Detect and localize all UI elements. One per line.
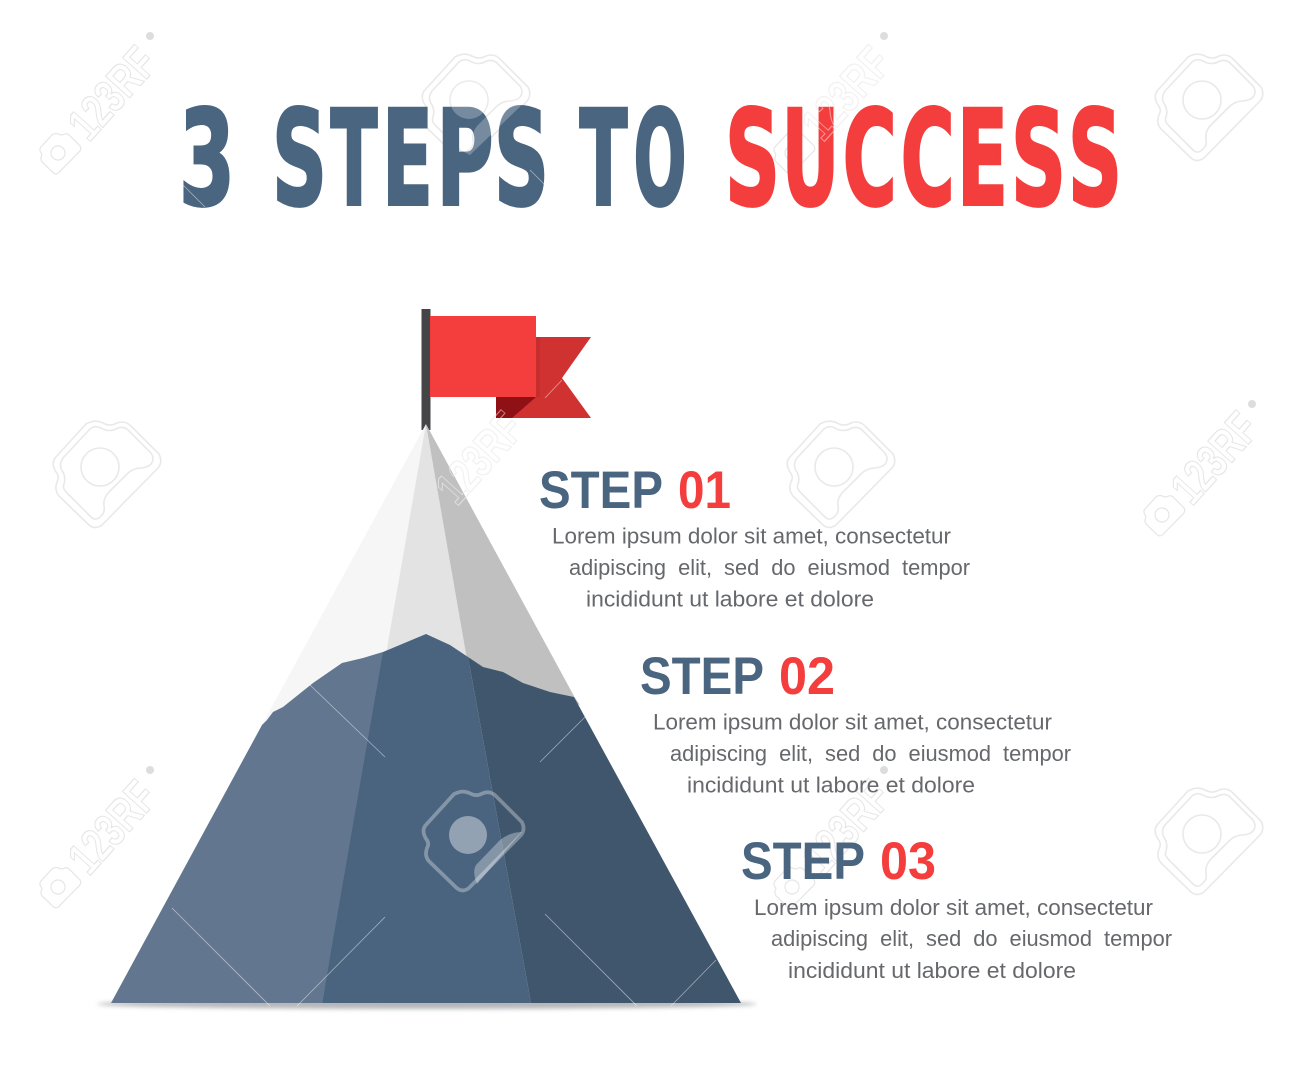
watermark overlay on artwork: 123RF bbox=[791, 36, 901, 150]
step 03: STEP bbox=[741, 832, 865, 891]
title: P bbox=[436, 82, 494, 236]
title: S bbox=[1068, 82, 1122, 236]
step 01: incididunt ut labore et dolore bbox=[586, 586, 874, 612]
snow cap bbox=[262, 424, 580, 725]
step 01: 01 bbox=[678, 461, 731, 520]
title: T bbox=[330, 82, 378, 236]
title: S bbox=[272, 82, 327, 236]
title: S bbox=[1011, 82, 1066, 236]
step 03: incididunt ut labore et dolore bbox=[788, 958, 1076, 983]
stock watermarks: 123RF bbox=[57, 36, 167, 150]
title: 3 bbox=[179, 82, 235, 236]
watermark egg on mountain bbox=[424, 792, 524, 890]
title: E bbox=[957, 82, 1008, 236]
title: C bbox=[843, 82, 897, 236]
step 02: STEP bbox=[640, 647, 764, 706]
mountain shadow bbox=[97, 999, 757, 1009]
step 02: Lorem ipsum dolor sit amet, consectetur bbox=[653, 710, 1052, 734]
stock watermarks: 123RF bbox=[1160, 402, 1268, 514]
title: O bbox=[634, 82, 686, 236]
step 03: adipiscing elit, sed do eiusmod tempor bbox=[771, 926, 1172, 951]
step 03 bbox=[741, 832, 1172, 983]
rock body bbox=[111, 634, 741, 1003]
stock watermarks: 123RF bbox=[57, 770, 167, 884]
step 01: adipiscing elit, sed do eiusmod tempor bbox=[569, 555, 970, 580]
step 02 bbox=[640, 647, 1071, 798]
flag bbox=[422, 309, 591, 430]
stock watermarks: 123RF bbox=[791, 770, 901, 884]
watermark overlay on artwork: 123RF bbox=[425, 402, 533, 514]
step 01: STEP bbox=[539, 461, 663, 520]
step 03: Lorem ipsum dolor sit amet, consectetur bbox=[754, 895, 1153, 920]
stock watermarks: 123RF bbox=[791, 36, 901, 150]
watermark overlay on artwork bbox=[172, 36, 901, 1006]
mountain bbox=[97, 424, 757, 1009]
step 02: adipiscing elit, sed do eiusmod tempor bbox=[670, 741, 1071, 766]
stock watermarks bbox=[40, 32, 1268, 908]
title: U bbox=[782, 82, 839, 236]
step 02: 02 bbox=[779, 647, 835, 706]
step 01: Lorem ipsum dolor sit amet, consectetur bbox=[552, 524, 951, 548]
title: T bbox=[580, 82, 628, 236]
stock watermarks: 123RF bbox=[425, 402, 533, 514]
title: C bbox=[901, 82, 955, 236]
title: S bbox=[725, 82, 780, 236]
step 01 bbox=[539, 461, 970, 612]
title bbox=[179, 82, 1122, 236]
step 02: incididunt ut labore et dolore bbox=[687, 772, 975, 798]
title: S bbox=[494, 82, 549, 236]
step 03: 03 bbox=[880, 832, 936, 891]
title: E bbox=[382, 82, 433, 236]
